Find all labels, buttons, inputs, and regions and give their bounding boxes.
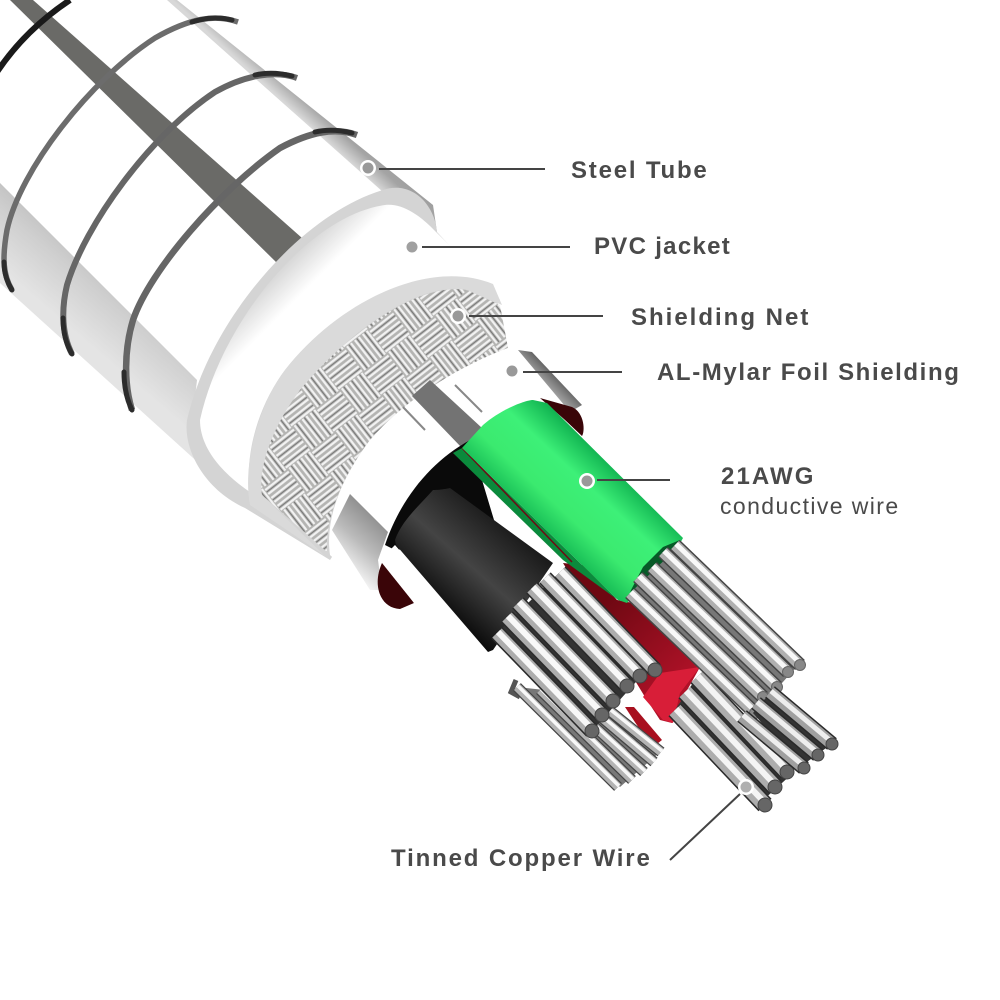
tube: dark ring 3: [126, 131, 357, 410]
leader: foil: [504, 363, 622, 379]
tube: dark ring 1: [4, 18, 238, 290]
white wire: [383, 545, 662, 787]
green wire: strands: [630, 544, 806, 718]
opening: dark red upper: [540, 398, 584, 436]
tube: black ring 0: [0, 0, 70, 72]
label: 21AWG conductive wire: [720, 463, 900, 519]
foil: upper right shaded strip: [518, 350, 582, 412]
tube: dark ring 2: [63, 74, 297, 354]
opening: dark hole: [385, 440, 500, 550]
tube: lower shaded band: [0, 183, 245, 505]
label: PVC jacket: PVC jacket: [594, 233, 731, 260]
green wire: dark inner opening: [630, 540, 680, 592]
green wire: sheath: [462, 400, 683, 603]
red wire: end lip: [643, 667, 700, 723]
leader: tinned copper wire: [670, 779, 754, 860]
label: AL-Mylar Foil Shielding: AL-Mylar Foil Shielding: [657, 359, 960, 386]
foil: dark strip: [412, 380, 482, 448]
tube: central dark stripe: [10, 0, 302, 263]
leader: conductive wire: [579, 473, 670, 489]
tube: upper shaded band: [167, 0, 437, 232]
jacket: white body: [200, 205, 492, 492]
label: Tinned Copper Wire: Tinned Copper Wire: [391, 845, 652, 872]
jacket: front crescent: [248, 276, 502, 556]
white wire: dark backing: [517, 687, 660, 787]
label: 21AWG conductive wire: 21AWG: [721, 463, 816, 490]
shielding net: [261, 289, 508, 552]
white wire: red strip behind: [625, 707, 662, 748]
foil: bright body: [329, 348, 585, 612]
white wire: sheath: [383, 545, 520, 695]
red wire: sheath: [563, 563, 700, 723]
white wire: cut end: [511, 680, 520, 697]
green wire: dark red seam: [462, 448, 572, 562]
black wire: strands: [497, 571, 662, 738]
opening: dark red lower: [378, 563, 414, 609]
red wire: strands: [675, 676, 794, 812]
red wire: rear strand cluster: [742, 691, 838, 774]
tube: ring 2 dark accents: [63, 73, 292, 354]
label: 21AWG conductive wire: conductive wire: [720, 493, 900, 519]
jacket: back rim: [187, 188, 500, 560]
tube: ring 1 dark accents: [4, 18, 232, 290]
black wire: [395, 488, 662, 738]
tube: ring 3 dark accents: [124, 130, 352, 410]
green wire: [453, 400, 806, 718]
leader: shielding net: [450, 308, 603, 324]
label: Steel Tube: Steel Tube: [571, 157, 709, 184]
leader: PVC jacket: [406, 242, 570, 252]
green wire: dark underside: [453, 448, 618, 600]
leader: steel tube: [360, 160, 545, 176]
PVC jacket: [187, 188, 502, 560]
foil: lower shaded strip: [332, 494, 388, 590]
foil: thin lines: [403, 385, 482, 430]
white wire: strands: [517, 686, 662, 787]
label: Shielding Net: Shielding Net: [631, 304, 810, 331]
cable opening: [378, 398, 584, 609]
steel tube: [0, 0, 437, 505]
foil shielding: [329, 348, 585, 612]
red wire: [563, 563, 794, 812]
black wire: sheath: [395, 488, 553, 652]
